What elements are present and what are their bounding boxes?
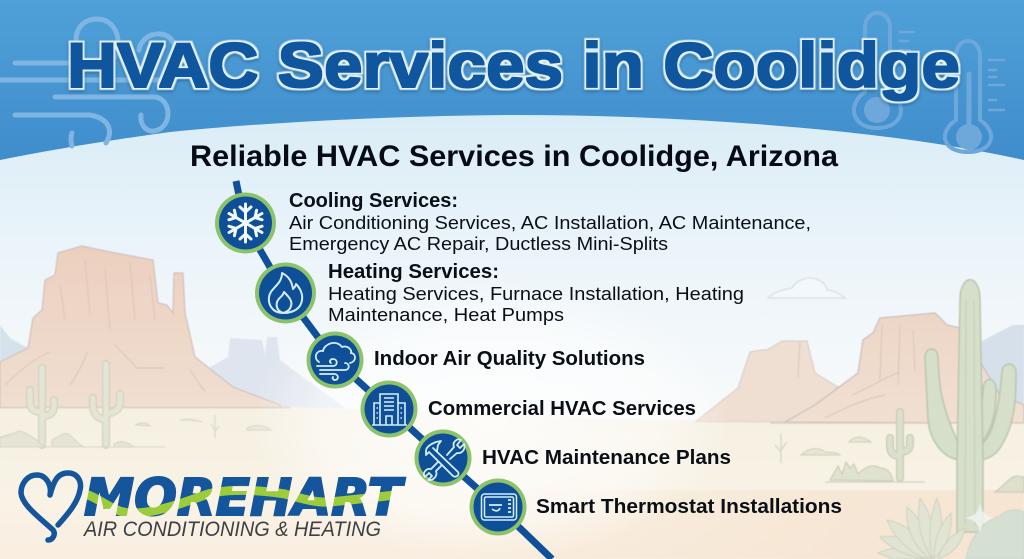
background: desert sky xyxy=(0,100,1024,420)
right ground plants xyxy=(775,433,871,463)
peach ground band xyxy=(400,490,1024,559)
text block: heating services: Heating Services: xyxy=(328,261,499,283)
icon: thermostat xyxy=(470,478,526,536)
shrub far right xyxy=(995,476,1024,492)
cloud right xyxy=(768,278,845,298)
far hill right xyxy=(965,325,1024,410)
bush right xyxy=(830,462,893,481)
far hill left xyxy=(0,325,28,366)
text block: cooling services: Emergency AC Repair, Ductless Mini-Splits xyxy=(289,233,668,254)
text block: heating services: Heating Services, Furnace Installation, Heating xyxy=(328,283,744,304)
cactus trunk xyxy=(957,280,983,532)
small cactus right xyxy=(890,412,910,478)
logo: Morehart xyxy=(21,469,406,541)
logo tagline: AIR CONDITIONING & HEATING xyxy=(82,518,381,541)
timeline line xyxy=(236,181,552,559)
big mesa right xyxy=(785,313,1024,423)
text block: heating services: Maintenance, Heat Pumps xyxy=(328,304,564,325)
title: HVAC Services in Coolidge xyxy=(67,31,960,101)
header band xyxy=(0,0,1024,160)
large mesa left xyxy=(0,246,280,408)
agave xyxy=(878,498,965,559)
icon: snowflake xyxy=(215,192,276,254)
text block: cooling services: Air Conditioning Services, AC Installation, AC Maintenance, xyxy=(289,212,811,233)
left cacti xyxy=(30,364,120,445)
label: commercial HVAC: Commercial HVAC Services xyxy=(428,398,696,420)
mid mesa right xyxy=(695,341,838,422)
cactus middle arm xyxy=(970,380,996,449)
label: smart thermostat: Smart Thermostat Installations xyxy=(536,496,842,518)
background: desert landscape xyxy=(0,246,1024,559)
soft glow behind list xyxy=(250,280,730,559)
label: maintenance plans: HVAC Maintenance Plans xyxy=(482,447,731,469)
icon: flame xyxy=(255,262,316,324)
text block: heating services xyxy=(328,261,744,325)
subtitle: Reliable HVAC Services in Coolidge, Arizona xyxy=(190,140,838,173)
icon: crossed tools xyxy=(414,430,472,486)
logo heart xyxy=(21,473,80,540)
icon: office building xyxy=(360,380,418,438)
text block: cooling services xyxy=(289,190,811,254)
left mesa cracks xyxy=(5,260,205,392)
logo wordmark: MOREHART xyxy=(84,469,406,528)
icon: cloud and wind xyxy=(306,332,364,388)
left bushes xyxy=(0,431,134,447)
ground xyxy=(0,407,1024,559)
cactus right arm xyxy=(976,364,1016,460)
sparkle xyxy=(965,502,995,534)
right mesa cracks xyxy=(798,325,915,418)
icon: thermometer one xyxy=(854,13,914,128)
icon: thermometer two xyxy=(945,41,1004,152)
icon: wind lines xyxy=(0,19,176,146)
text block: cooling services: Cooling Services: xyxy=(289,190,458,212)
bush bottom right xyxy=(966,510,1024,559)
large saguaro cactus xyxy=(925,280,1016,532)
small left plants xyxy=(136,415,271,438)
far mesa left xyxy=(208,337,345,408)
cactus left arm xyxy=(925,349,960,460)
label: indoor air quality: Indoor Air Quality Solutions xyxy=(374,348,645,370)
